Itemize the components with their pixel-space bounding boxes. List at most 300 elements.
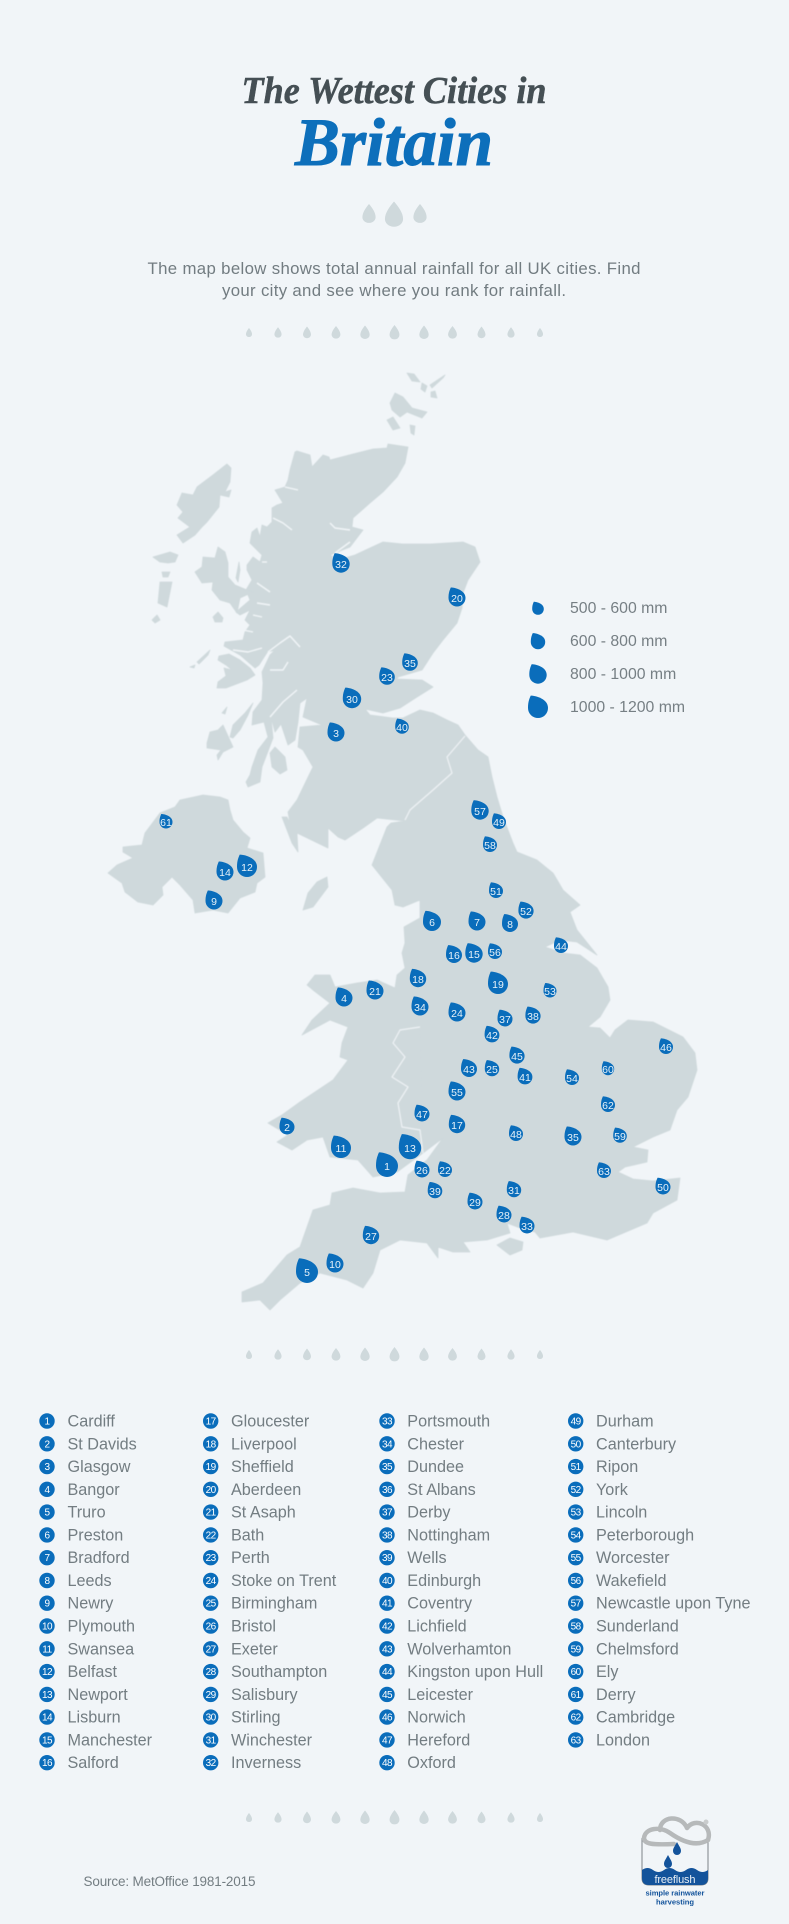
- city 2: 2: [44, 1439, 50, 1450]
- city 51: 51: [571, 1462, 582, 1473]
- pin 29: 29: [469, 1197, 481, 1209]
- city 48: 48: [382, 1758, 393, 1769]
- city 51: [568, 1458, 638, 1476]
- Mull: [217, 654, 255, 688]
- pin 11: 11: [336, 1143, 347, 1155]
- rainfall pins: [160, 553, 673, 1283]
- pin 15: 15: [468, 949, 480, 961]
- pin 63: 63: [598, 1166, 610, 1178]
- city 53: 53: [571, 1508, 582, 1519]
- city 17: Gloucester: [231, 1412, 310, 1430]
- city 30: [203, 1709, 280, 1727]
- city 63: [568, 1731, 650, 1749]
- pin 7: [468, 911, 486, 930]
- pin 29: [468, 1193, 482, 1210]
- city 39: [379, 1549, 447, 1567]
- legend item 800-1000 mm: [529, 664, 676, 684]
- pin 62: 62: [602, 1100, 614, 1112]
- city 15: 15: [42, 1735, 53, 1746]
- city 12: 12: [42, 1667, 53, 1678]
- logo water: [642, 1868, 708, 1885]
- city 55: 55: [571, 1553, 582, 1564]
- pin 56: [488, 943, 502, 959]
- city 22: Bath: [231, 1526, 264, 1544]
- pin 4: [336, 987, 352, 1006]
- city 44: 44: [382, 1667, 393, 1678]
- pin 55: 55: [451, 1087, 463, 1099]
- city 60: [568, 1663, 619, 1681]
- drop divider middle: [246, 1347, 543, 1361]
- city 49: 49: [571, 1416, 582, 1428]
- city 24: 24: [206, 1576, 217, 1587]
- city 21: St Asaph: [231, 1504, 296, 1522]
- city 48: [379, 1754, 456, 1772]
- pin 57: [471, 800, 489, 820]
- city 16: Salford: [68, 1754, 119, 1772]
- city 44: Kingston upon Hull: [407, 1663, 543, 1681]
- pin 5: [296, 1258, 318, 1283]
- city 47: [379, 1731, 470, 1749]
- pin 39: 39: [429, 1186, 441, 1198]
- city 42: [379, 1618, 467, 1636]
- pin 51: [489, 882, 503, 898]
- city 60: 60: [571, 1667, 582, 1678]
- Orkney: [390, 393, 427, 418]
- city 29: 29: [206, 1690, 217, 1701]
- pin 12: 12: [241, 862, 253, 874]
- pin 54: 54: [566, 1073, 578, 1085]
- pin 58: 58: [484, 840, 496, 852]
- city 46: 46: [382, 1713, 393, 1724]
- city 28: 28: [206, 1667, 217, 1678]
- pin 33: 33: [521, 1221, 533, 1233]
- pin 44: 44: [555, 941, 567, 953]
- city 63: 63: [571, 1735, 582, 1746]
- city 10: 10: [42, 1622, 53, 1632]
- city 51: Ripon: [596, 1458, 638, 1476]
- city 52: 52: [571, 1485, 582, 1496]
- pin 60: 60: [602, 1064, 614, 1076]
- pin 33: [520, 1217, 534, 1234]
- city 63: London: [596, 1731, 650, 1749]
- city 11: 11: [42, 1644, 53, 1655]
- city 32: 32: [206, 1758, 217, 1769]
- pin 38: 38: [527, 1011, 539, 1023]
- Jura: [230, 703, 253, 738]
- pin 14: 14: [219, 867, 231, 879]
- city 22: 22: [206, 1530, 217, 1541]
- city 60: Ely: [596, 1663, 619, 1681]
- Isle of Wight: [497, 1238, 523, 1255]
- city 45: [379, 1686, 474, 1704]
- city 34: 34: [382, 1439, 393, 1450]
- pin 24: 24: [451, 1008, 463, 1020]
- legend item 500-600 mm: 500 - 600 mm: [570, 600, 667, 617]
- title: Britain: [294, 104, 493, 180]
- city 49: Durham: [596, 1412, 654, 1430]
- pin 23: 23: [381, 672, 393, 684]
- city 1: 1: [44, 1416, 50, 1428]
- Great Britain mainland: [224, 444, 697, 1310]
- city 36: 36: [382, 1485, 393, 1496]
- legend: [528, 600, 685, 718]
- city 29: Salisbury: [231, 1686, 298, 1704]
- city 12: Belfast: [68, 1663, 117, 1681]
- city 7: Bradford: [68, 1549, 130, 1567]
- city 23: Perth: [231, 1549, 270, 1567]
- Northern Ireland: [108, 795, 265, 913]
- city 13: 13: [42, 1690, 53, 1701]
- city 4: Bangor: [68, 1481, 120, 1499]
- Colonsay: [222, 707, 227, 714]
- city 59: 59: [571, 1644, 582, 1655]
- city 37: 37: [382, 1508, 393, 1519]
- city 5: 5: [44, 1508, 50, 1519]
- pin 37: 37: [499, 1014, 511, 1026]
- pin 30: 30: [346, 694, 358, 706]
- pin 31: [507, 1181, 521, 1197]
- pin 50: 50: [657, 1182, 669, 1194]
- pin 50: [656, 1178, 670, 1194]
- city 62: Cambridge: [596, 1709, 675, 1727]
- intro text: your city and see where you rank for rainfall.: [222, 281, 566, 300]
- Lewis and Harris: [177, 464, 231, 543]
- city 6: Preston: [68, 1526, 123, 1544]
- legend item 600-800 mm: 600 - 800 mm: [570, 633, 667, 650]
- pin 20: [448, 587, 466, 606]
- city 21: 21: [206, 1508, 217, 1519]
- pin 39: [428, 1182, 442, 1198]
- pin 55: [448, 1081, 466, 1100]
- city 47: 47: [382, 1735, 393, 1746]
- pin 28: [496, 1206, 512, 1222]
- city 59: Chelmsford: [596, 1640, 679, 1658]
- pin 19: [488, 972, 508, 994]
- city 52: [568, 1481, 629, 1499]
- city 61: [568, 1686, 636, 1704]
- intro text: The map below shows total annual rainfall for all UK cities. Find: [148, 259, 640, 278]
- logo tagline: simple rainwater: [646, 1888, 705, 1898]
- city 43: Wolverhamton: [407, 1640, 511, 1658]
- city 14: 14: [42, 1713, 53, 1724]
- city 57: 57: [571, 1599, 582, 1610]
- column 3: [379, 1412, 543, 1772]
- pin 25: 25: [486, 1064, 498, 1076]
- pin 54: [565, 1069, 579, 1085]
- city 45: Leicester: [407, 1686, 474, 1704]
- pin 52: 52: [520, 906, 532, 918]
- pin 41: [518, 1068, 532, 1084]
- logo tagline: harvesting: [656, 1898, 694, 1906]
- pin 53: 53: [544, 986, 556, 998]
- pin 56: 56: [489, 947, 501, 959]
- city 16: [39, 1754, 119, 1772]
- city 1: [39, 1412, 115, 1430]
- city 18: 18: [206, 1439, 217, 1450]
- pin 5: 5: [304, 1267, 310, 1279]
- city 27: 27: [206, 1644, 217, 1655]
- city 58: Sunderland: [596, 1618, 679, 1636]
- source note: Source: MetOffice 1981-2015: [84, 1874, 256, 1889]
- city 25: 25: [206, 1599, 217, 1610]
- city 34: [379, 1435, 465, 1453]
- city 6: [39, 1526, 123, 1544]
- pin 18: 18: [412, 974, 424, 986]
- city 62: 62: [571, 1713, 582, 1724]
- North Uist: [153, 552, 178, 563]
- pin 14: [216, 861, 234, 880]
- city 9: [39, 1595, 114, 1613]
- pin 26: 26: [416, 1165, 428, 1177]
- pin 19: 19: [492, 979, 504, 991]
- legend item 1000-1200 mm: [528, 696, 685, 718]
- pin 17: 17: [451, 1120, 463, 1132]
- Shetland islets: [407, 373, 420, 382]
- city 5: [39, 1504, 106, 1522]
- city 26: Bristol: [231, 1618, 276, 1636]
- drop divider bottom: [246, 1810, 543, 1824]
- city 18: Liverpool: [231, 1435, 297, 1453]
- city 31: 31: [206, 1735, 217, 1746]
- city 24: Stoke on Trent: [231, 1572, 337, 1590]
- pin 10: [326, 1253, 344, 1272]
- Raasay: [236, 562, 240, 582]
- city 28: Southampton: [231, 1663, 327, 1681]
- pin 35 Dundee: 35: [404, 658, 416, 670]
- Rum and Eigg: [213, 612, 223, 622]
- city 58: 58: [571, 1622, 582, 1632]
- logo: freeflush: [642, 1818, 709, 1906]
- icon: three rain drops: [362, 202, 427, 227]
- city 32: Inverness: [231, 1754, 301, 1772]
- city 41: 41: [382, 1599, 393, 1610]
- pin 9: 9: [211, 896, 217, 908]
- pin 16: [446, 945, 462, 963]
- map of the UK: [108, 373, 697, 1310]
- pin 22: [438, 1161, 452, 1177]
- city 54: Peterborough: [596, 1526, 694, 1544]
- pin 47: 47: [416, 1109, 428, 1121]
- pin 46: 46: [660, 1042, 672, 1054]
- Benbecula: [162, 572, 170, 577]
- pin 3: [328, 722, 344, 742]
- inlets: coastal lochs: [233, 487, 350, 717]
- city 4: [39, 1481, 120, 1499]
- city 46: [379, 1709, 466, 1727]
- city 61: Derry: [596, 1686, 636, 1704]
- city 41: Coventry: [407, 1595, 473, 1613]
- city 50: 50: [571, 1439, 582, 1450]
- city 42: Lichfield: [407, 1618, 467, 1636]
- city 40: 40: [382, 1576, 393, 1587]
- pin 17: [449, 1115, 465, 1133]
- city 27: [203, 1640, 278, 1658]
- pin 37: [498, 1010, 512, 1026]
- pin 62: [601, 1096, 615, 1112]
- city 49: [568, 1412, 654, 1430]
- logo tagline: [646, 1888, 705, 1906]
- pin 13: 13: [404, 1143, 416, 1155]
- pin 23: [379, 667, 395, 685]
- pin 31: 31: [508, 1185, 520, 1197]
- pin 32: [332, 553, 350, 573]
- pin 44: [554, 937, 568, 953]
- pin 27: [363, 1226, 379, 1244]
- city 39: 39: [382, 1553, 393, 1564]
- title: [242, 70, 546, 180]
- city 38: 38: [382, 1530, 393, 1541]
- city 35: [379, 1458, 464, 1476]
- logo registered mark: [704, 1820, 708, 1824]
- Arran: [270, 747, 287, 774]
- city 14: Lisburn: [68, 1709, 121, 1727]
- city 25: Birmingham: [231, 1595, 317, 1613]
- city 39: Wells: [407, 1549, 447, 1567]
- city 37: Derby: [407, 1504, 451, 1522]
- city 19: [203, 1458, 294, 1476]
- city 8: 8: [44, 1576, 50, 1587]
- pin 15: [465, 943, 483, 963]
- pin 21: [366, 980, 384, 1000]
- pin 40: 40: [396, 722, 408, 734]
- pin 52: [518, 902, 534, 919]
- city 50: Canterbury: [596, 1435, 677, 1453]
- city list: [39, 1412, 750, 1772]
- city 21: [203, 1504, 296, 1522]
- pin 1: [376, 1152, 398, 1177]
- pin 6: 6: [429, 917, 435, 929]
- city 47: Hereford: [407, 1731, 470, 1749]
- pin 2: 2: [284, 1122, 290, 1134]
- pin 2: [280, 1118, 294, 1134]
- city 8: Leeds: [68, 1572, 112, 1590]
- pin 45: [509, 1047, 525, 1064]
- pin 8: [502, 914, 518, 932]
- city 30: Stirling: [231, 1709, 280, 1727]
- pin 20: 20: [451, 593, 463, 605]
- pin 35 south-east: 35: [567, 1132, 579, 1144]
- pin 18: [410, 969, 426, 987]
- pin 27: 27: [365, 1231, 377, 1243]
- Islay: [207, 725, 233, 760]
- logo wordmark: freeflush: [654, 1874, 696, 1886]
- pin 11: [331, 1136, 351, 1158]
- city 3: Glasgow: [68, 1458, 131, 1476]
- city 55: Worcester: [596, 1549, 670, 1567]
- pin 34: [412, 996, 428, 1016]
- pin 35 Dundee: [402, 653, 418, 671]
- city 14: [39, 1709, 121, 1727]
- drop divider top: [246, 325, 543, 339]
- city 19: 19: [206, 1462, 217, 1473]
- city 56: Wakefield: [596, 1572, 666, 1590]
- city 36: St Albans: [407, 1481, 476, 1499]
- pin 48: [509, 1125, 523, 1141]
- city 13: Newport: [68, 1686, 128, 1704]
- city 23: 23: [206, 1553, 217, 1564]
- city 11: Swansea: [68, 1640, 134, 1658]
- Skye: [195, 547, 253, 613]
- pin 61: 61: [160, 817, 172, 829]
- Coll and Tiree: [197, 650, 210, 664]
- city 48: Oxford: [407, 1754, 456, 1772]
- pin 9: [206, 890, 222, 910]
- city 34: Chester: [407, 1435, 465, 1453]
- pin 40: [395, 719, 409, 734]
- pin 30: [343, 688, 361, 708]
- pin 16: 16: [448, 950, 460, 962]
- pin 51: 51: [490, 886, 502, 898]
- city 1: Cardiff: [68, 1412, 115, 1430]
- legend item 1000-1200 mm: 1000 - 1200 mm: [570, 699, 685, 716]
- city 5: Truro: [68, 1504, 106, 1522]
- pin 10: 10: [329, 1259, 341, 1271]
- pin 22: 22: [439, 1165, 451, 1177]
- pin 3: 3: [333, 728, 339, 740]
- pin 26: [414, 1161, 430, 1178]
- pin 38: [525, 1007, 541, 1024]
- pin 42: 42: [486, 1030, 498, 1042]
- Barra: [152, 615, 160, 623]
- pin 25: [485, 1060, 499, 1076]
- city 27: Exeter: [231, 1640, 278, 1658]
- city 17: 17: [206, 1416, 217, 1428]
- city 45: 45: [382, 1690, 393, 1701]
- pin 1: 1: [384, 1161, 390, 1173]
- pin 34: 34: [414, 1002, 426, 1014]
- column 2: [203, 1412, 337, 1772]
- city 3: [39, 1458, 131, 1476]
- city 6: 6: [44, 1530, 50, 1541]
- city 4: 4: [44, 1485, 50, 1496]
- pin 43: [461, 1059, 477, 1077]
- city 38: Nottingham: [407, 1526, 490, 1544]
- pin 48: 48: [510, 1129, 522, 1141]
- city 2: St Davids: [68, 1435, 137, 1453]
- city 33: 33: [382, 1416, 393, 1428]
- city 35: Dundee: [407, 1458, 464, 1476]
- city 29: [203, 1686, 298, 1704]
- pin 46: [659, 1038, 673, 1054]
- city 7: 7: [44, 1553, 50, 1564]
- column 4: [568, 1412, 750, 1749]
- intro text: [148, 259, 640, 300]
- pin 12: [237, 855, 257, 877]
- pin 47: [414, 1105, 430, 1122]
- city 9: Newry: [68, 1595, 114, 1613]
- city 12: [39, 1663, 117, 1681]
- city 13: [39, 1686, 128, 1704]
- city 52: York: [596, 1481, 629, 1499]
- pin 49: 49: [493, 817, 505, 829]
- pin 4: 4: [341, 993, 347, 1005]
- pin 24: [448, 1002, 466, 1022]
- pin 28: 28: [498, 1210, 510, 1222]
- city 7: [39, 1549, 130, 1567]
- city 61: 61: [571, 1690, 582, 1701]
- city 30: 30: [206, 1713, 217, 1724]
- border lines: [392, 736, 465, 1153]
- pin 21: 21: [369, 986, 381, 998]
- city 10: Plymouth: [68, 1618, 135, 1636]
- city 8: [39, 1572, 112, 1590]
- pin 49: [492, 813, 506, 829]
- South Uist: [158, 582, 172, 607]
- column 1: [39, 1412, 153, 1772]
- city 53: [568, 1504, 647, 1522]
- pin 63: [597, 1162, 611, 1178]
- city 41: [379, 1595, 473, 1613]
